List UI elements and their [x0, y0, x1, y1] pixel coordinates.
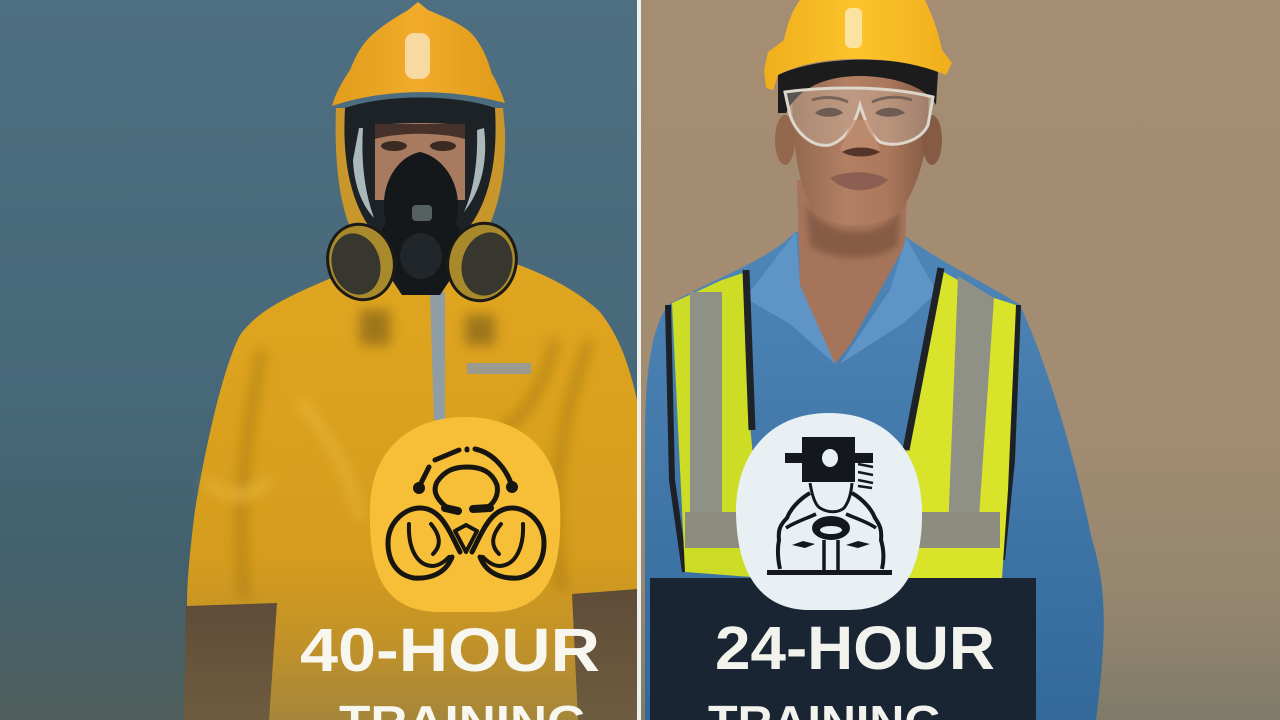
- neck shadow: [806, 205, 900, 258]
- dashed arc: [420, 449, 512, 486]
- base line: [767, 570, 892, 575]
- panel: left background: [0, 0, 637, 720]
- hard hat: [764, 0, 952, 90]
- dark placard: [650, 578, 1036, 720]
- vest right yellow: [890, 270, 1016, 578]
- left ring: [388, 508, 460, 578]
- icon: seated worker symbol: [767, 437, 892, 575]
- safety glasses: [785, 88, 933, 145]
- mask front valve: [400, 233, 442, 279]
- icon: respirator symbol: [388, 449, 544, 578]
- exhaust lines: [858, 464, 873, 488]
- brow shadow: [375, 124, 465, 139]
- machine block: [785, 437, 873, 482]
- vest left yellow: [672, 272, 765, 578]
- shoulders: [786, 514, 876, 528]
- head: [792, 75, 929, 226]
- left ear: [775, 115, 795, 165]
- safety vest: [668, 268, 1018, 578]
- operator head: [822, 449, 838, 467]
- helmet: [332, 2, 505, 106]
- pedestal: [824, 540, 838, 570]
- visor glare: [353, 128, 485, 218]
- respirator mask: [384, 152, 458, 290]
- eyes: [812, 97, 912, 117]
- left filter: [319, 217, 403, 307]
- left wing mark: [792, 541, 815, 548]
- chest oval: [812, 516, 850, 540]
- right inner ring: [483, 524, 523, 566]
- panel: right background: [641, 0, 1280, 720]
- panel: worker in safety vest: [645, 0, 1104, 720]
- mask lower body: [372, 225, 470, 295]
- right glove: [572, 589, 637, 720]
- mask highlight: [412, 205, 432, 221]
- right wing mark: [846, 541, 870, 548]
- lens bars: [445, 508, 490, 511]
- funnel outline: [810, 483, 852, 512]
- heading: 24-hour: 24-HOUR: [715, 614, 995, 682]
- center divider: [637, 0, 641, 720]
- black hat band: [778, 60, 938, 113]
- yellow protective suit: [184, 260, 637, 720]
- dome: [435, 467, 497, 507]
- badge: 24-hour icon: [736, 413, 922, 610]
- vest edge right: [906, 268, 941, 450]
- chest oval center: [820, 526, 842, 534]
- eyes: [381, 141, 456, 151]
- face: [375, 123, 465, 200]
- hood around face: [336, 108, 505, 232]
- face visor: [344, 98, 496, 236]
- shirt collar right: [840, 238, 937, 364]
- suit chest pocket strip: [467, 363, 531, 374]
- right ring: [472, 508, 544, 578]
- suit zipper strip: [430, 292, 445, 420]
- suit fold shadows: [205, 310, 590, 600]
- blue shirt body: [645, 232, 1104, 720]
- reflective strip right: [948, 276, 994, 532]
- heading: 40-hour: 40-HOUR: [300, 616, 600, 684]
- left glove: [184, 603, 277, 720]
- vest edge left: [746, 270, 752, 430]
- right ear: [922, 115, 942, 165]
- vest outer edges: [668, 305, 1018, 572]
- panel: worker with respirator: [184, 2, 637, 720]
- reflective strip left: [690, 292, 722, 514]
- nose: [840, 120, 880, 156]
- shirt collar left: [745, 232, 835, 364]
- body outline: [778, 493, 883, 569]
- nostrils: [842, 148, 880, 156]
- neck: [797, 180, 907, 364]
- reflective waist band: [685, 512, 1000, 548]
- left inner ring: [409, 524, 449, 566]
- badge: 40-hour icon: [370, 417, 560, 612]
- mouth: [830, 172, 888, 190]
- right filter: [439, 216, 525, 308]
- chin: [455, 525, 477, 552]
